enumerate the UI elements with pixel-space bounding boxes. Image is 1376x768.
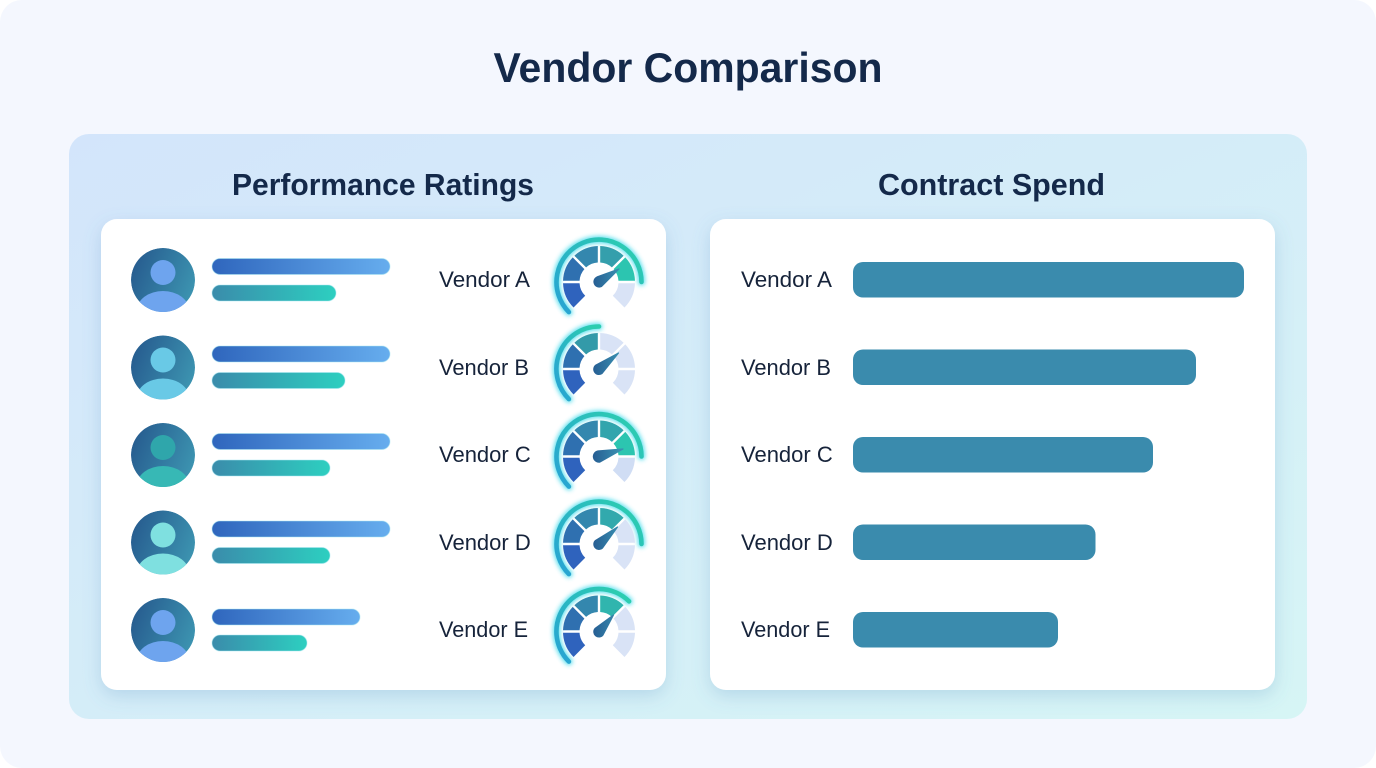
bar row: vendor A spend [741, 262, 1244, 298]
gauge: vendor C [557, 414, 642, 487]
row: vendor B rating [131, 326, 635, 416]
bar row: vendor E spend: Vendor E [741, 617, 830, 642]
row: vendor A rating [131, 240, 642, 329]
icon: avatar B [131, 336, 195, 400]
label: vendor A: Vendor A [439, 267, 530, 292]
bar row: vendor B spend [741, 350, 1196, 385]
gauge: vendor D [557, 502, 642, 574]
gauge: vendor E [556, 589, 635, 662]
heading: performance ratings: Performance Ratings [232, 167, 534, 202]
title: Vendor Comparison [494, 44, 882, 91]
icon: avatar E [131, 598, 195, 662]
icon: avatar D [131, 510, 195, 574]
bars: vendor A text placeholder [212, 258, 390, 301]
label: vendor D: Vendor D [439, 530, 531, 555]
gauge: vendor A [557, 240, 642, 312]
label: vendor E: Vendor E [439, 617, 528, 642]
row: vendor D rating [131, 502, 642, 592]
label: vendor B: Vendor B [439, 355, 529, 380]
row: vendor C rating [131, 414, 642, 504]
panel: contract spend [710, 219, 1275, 690]
row: vendor E rating [131, 589, 635, 679]
bar row: vendor D spend: Vendor D [741, 530, 833, 555]
bar row: vendor E spend [741, 612, 1058, 648]
label: vendor C: Vendor C [439, 442, 531, 467]
bar row: vendor C spend [741, 437, 1153, 472]
panel: performance ratings [101, 219, 666, 690]
bars: vendor B text placeholder [212, 346, 390, 388]
bar row: vendor B spend: Vendor B [741, 355, 831, 380]
bars: vendor D text placeholder [212, 521, 390, 564]
gauge: vendor B [556, 326, 635, 399]
heading: contract spend: Contract Spend [878, 167, 1105, 202]
bar row: vendor A spend: Vendor A [741, 267, 832, 292]
icon: avatar C [131, 423, 195, 487]
icon: avatar A [131, 248, 195, 312]
panel: comparison container [69, 134, 1307, 719]
bars: vendor E text placeholder [212, 609, 360, 651]
bar row: vendor D spend [741, 524, 1096, 560]
bars: vendor C text placeholder [212, 434, 390, 476]
bar row: vendor C spend: Vendor C [741, 442, 833, 467]
